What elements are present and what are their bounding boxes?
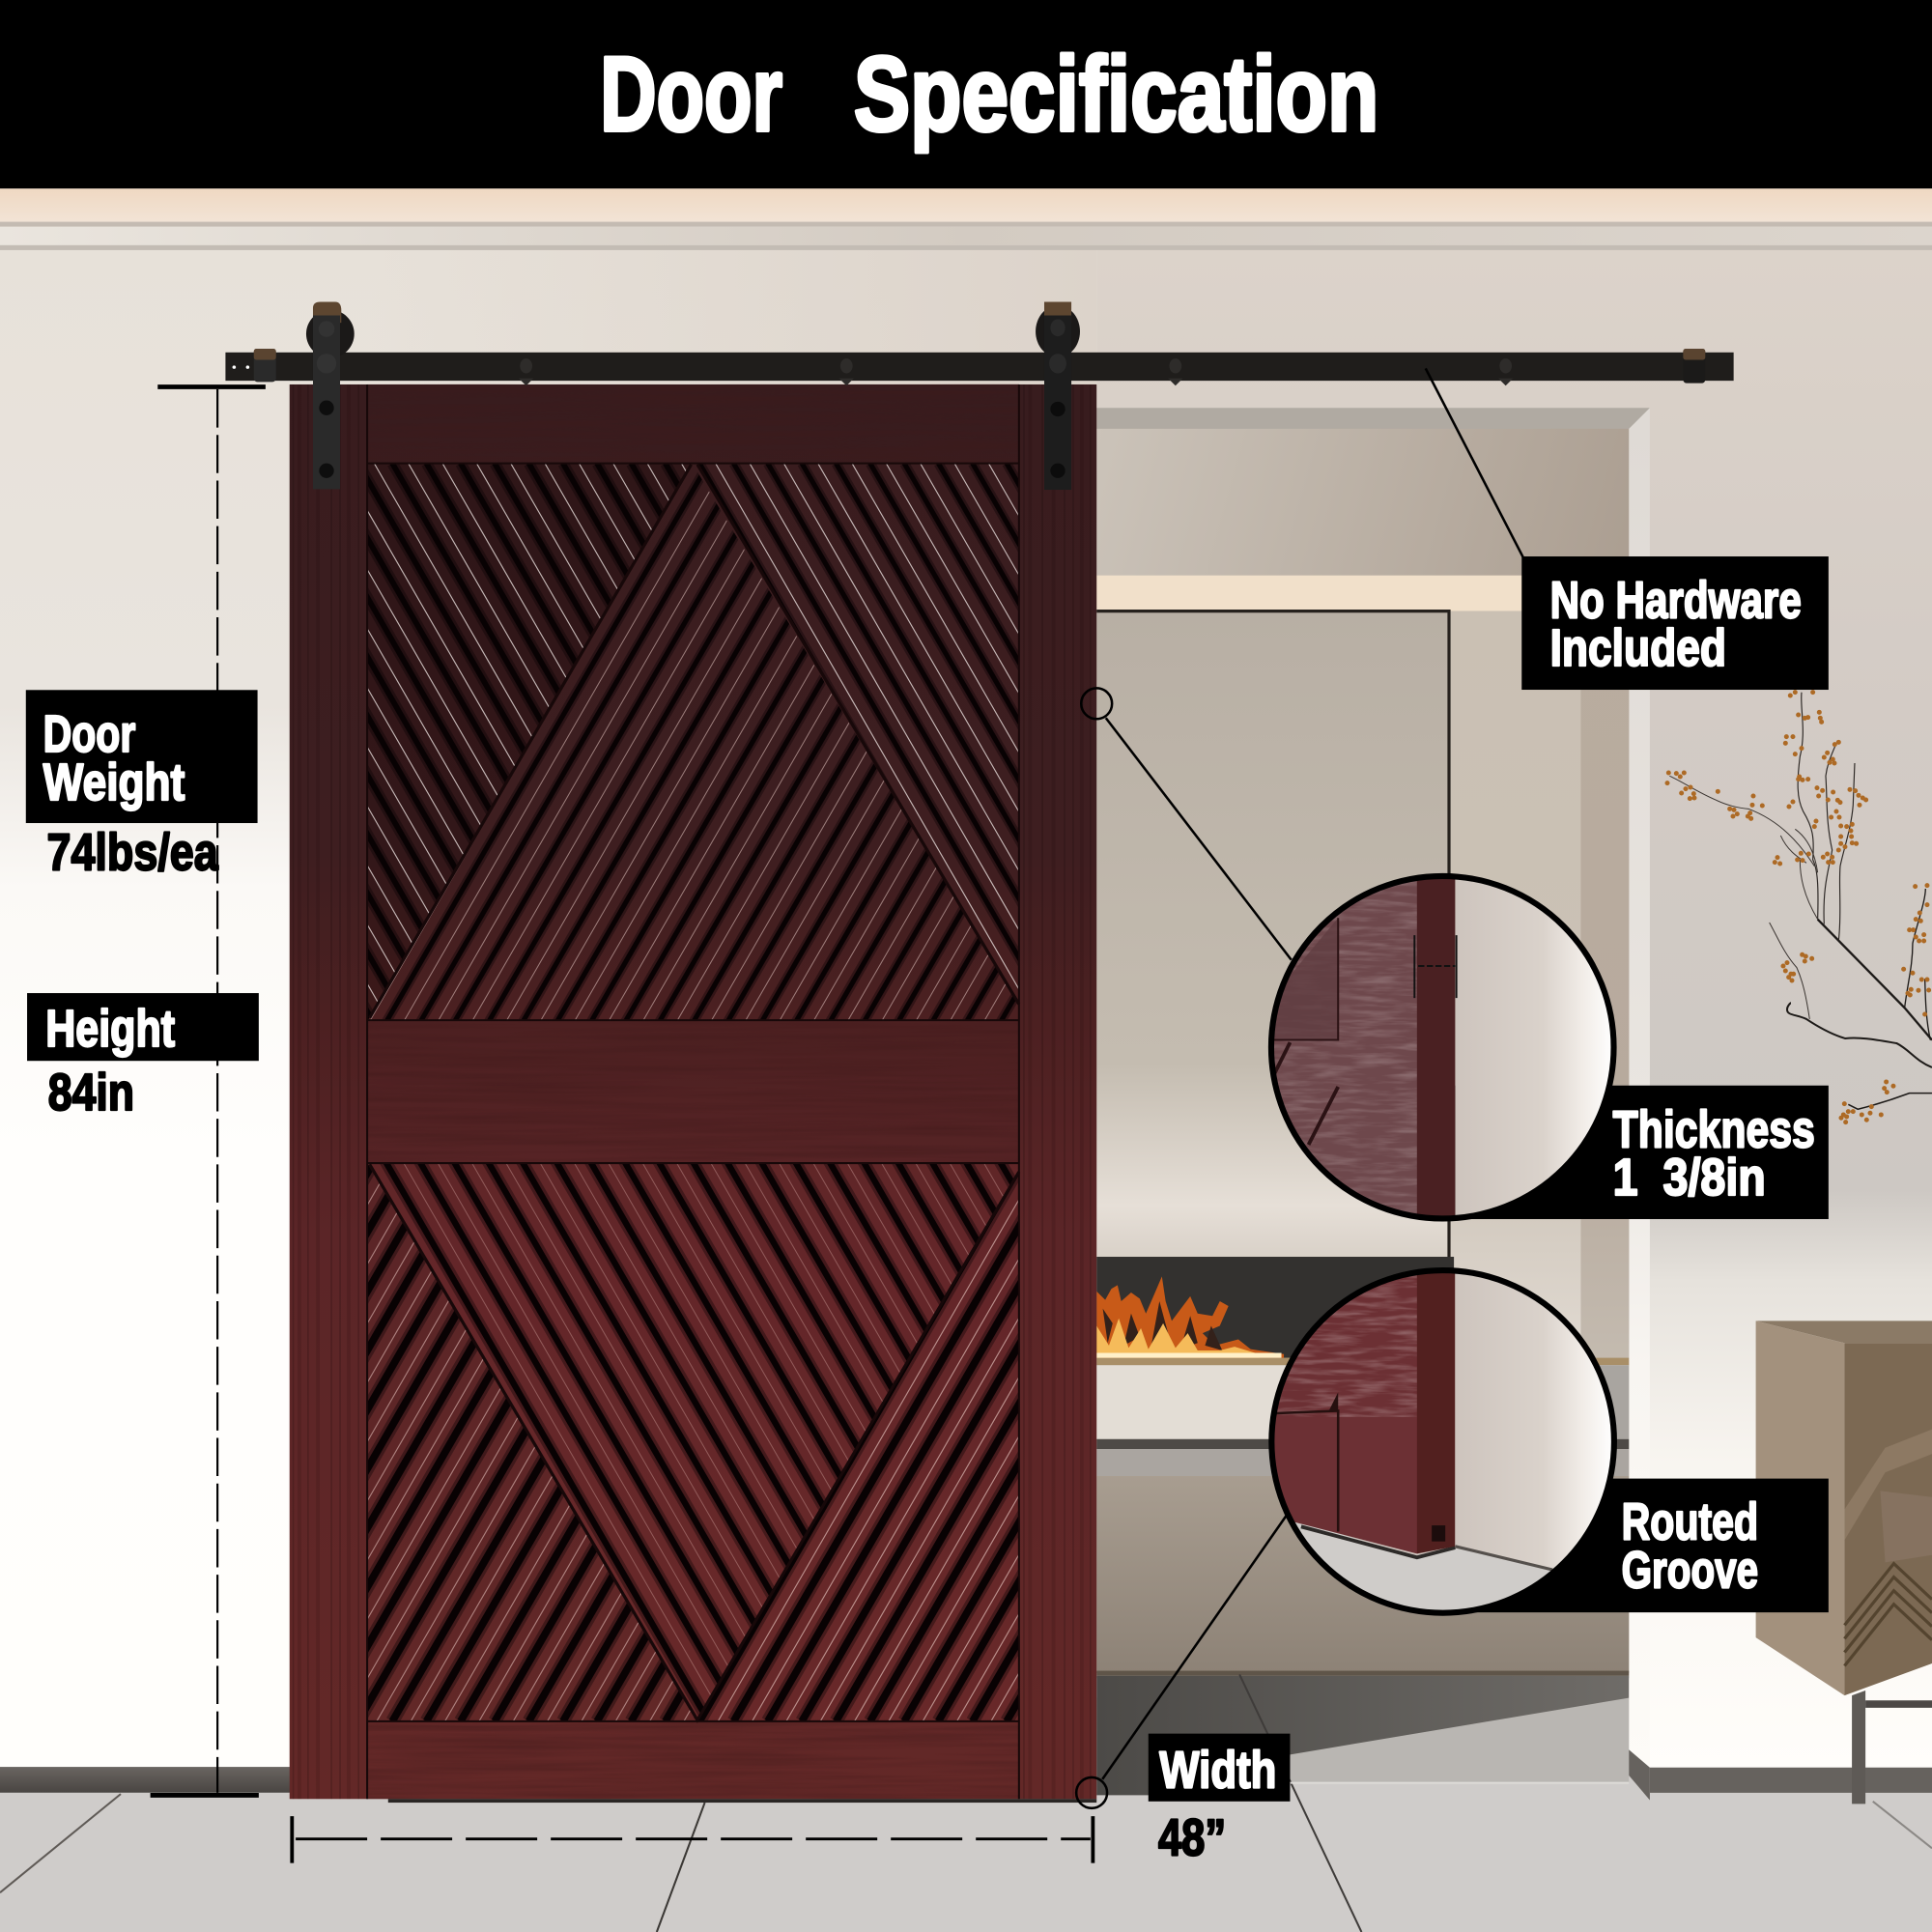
width dimension line: [292, 1816, 1093, 1863]
upper panel: left slats: [368, 464, 690, 1019]
upper panel: right slats: [699, 464, 1018, 989]
value: height: 84in: [48, 1065, 134, 1122]
wood grain on stiles: [294, 384, 1091, 1799]
doorway opening with interior scene: [1096, 408, 1650, 1768]
door: [290, 384, 1097, 1799]
lower panel: centre slats: [372, 1164, 1018, 1716]
title: [600, 36, 1378, 154]
label: width: Width: [1159, 1743, 1276, 1800]
label: routed groove: [1441, 1479, 1829, 1612]
header bar: [0, 0, 1932, 188]
right hanger: [1036, 301, 1080, 490]
label: thickness: [1441, 1086, 1829, 1219]
floor in and beyond the opening: [1096, 1676, 1932, 1932]
frame and boundary joints: [367, 384, 1019, 1799]
door face in inset: [1263, 1263, 1455, 1559]
height dimension line: [151, 387, 266, 1795]
rail mounting bolts: [519, 358, 1513, 385]
inset: routed groove detail: [1263, 1263, 1627, 1620]
title: Door: [600, 36, 782, 154]
label: door weight: Door: [43, 706, 135, 763]
floor in inset: [1263, 1509, 1627, 1620]
label: door weight: Weight: [43, 754, 185, 811]
cabinet: [1756, 1321, 1932, 1804]
label: thickness: 1 3/8in: [1613, 1150, 1766, 1207]
value: width: 48”: [1158, 1809, 1226, 1866]
plant branches with berries: [1667, 693, 1932, 1122]
wall in inset: [1455, 868, 1622, 1226]
callout leader: hardware: [1426, 368, 1523, 557]
label: door weight: [26, 690, 258, 823]
floor tile joints: [0, 1674, 1932, 1932]
wall in inset: [1263, 1263, 1627, 1620]
label: routed groove: Routed: [1622, 1494, 1758, 1551]
label: height: [27, 993, 259, 1061]
label: no hardware included: Included: [1550, 620, 1726, 677]
fireplace flames: [1096, 1276, 1284, 1358]
upper panel: centre slats: [371, 472, 1016, 1020]
label: height: Height: [45, 1001, 175, 1058]
callout leader: thickness: [1081, 688, 1292, 960]
label: thickness: Thickness: [1613, 1101, 1815, 1158]
routed groove notch: [1432, 1525, 1445, 1542]
lower panel: left slats: [0, 464, 1750, 1721]
door edge in inset: [1417, 868, 1455, 1226]
door floor shadow: [388, 1799, 1096, 1803]
door slab: [290, 384, 1096, 1799]
lower panel: right slats: [0, 464, 1750, 1722]
label: routed groove: Groove: [1622, 1542, 1758, 1599]
value: door weight: 74lbs/ea: [46, 825, 219, 882]
title: Specification: [854, 36, 1378, 154]
left hanger: [306, 301, 355, 489]
barn door rail: [225, 349, 1734, 385]
wood grain on rails: [367, 384, 1019, 1799]
callout leader: routed groove: [1076, 1516, 1287, 1808]
door face in inset: [1263, 868, 1418, 1226]
inset: thickness detail: [1263, 868, 1622, 1226]
label: no hardware included: [1521, 556, 1829, 690]
label: no hardware included: No Hardware: [1550, 573, 1802, 630]
rail end clamps: [254, 349, 1705, 384]
